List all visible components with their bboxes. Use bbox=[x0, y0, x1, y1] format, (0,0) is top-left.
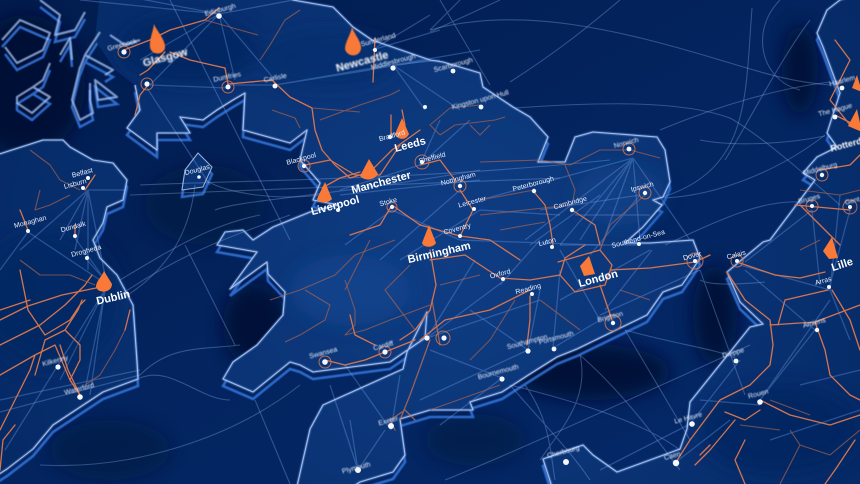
label: Dublin: Dublin bbox=[95, 288, 132, 308]
pin: right edge lower bbox=[848, 109, 860, 132]
blurred distant labels: Bruges bbox=[798, 193, 821, 206]
label: Lille: Lille bbox=[830, 256, 855, 274]
blurred distant labels: Plymouth bbox=[341, 461, 371, 476]
blurred distant labels: Cherbourg bbox=[547, 445, 580, 460]
blurred distant labels: Portsmouth bbox=[538, 330, 575, 346]
sharp town labels: Arras bbox=[814, 276, 833, 287]
blurred distant labels: Edinburgh bbox=[204, 3, 237, 18]
sharp town labels: Dover bbox=[682, 250, 703, 262]
sharp town labels: Peterborough bbox=[512, 176, 555, 193]
blurred distant labels: Dieppe bbox=[722, 347, 745, 360]
orange pins bbox=[96, 24, 860, 292]
pin: Lille bbox=[823, 237, 838, 259]
sharp town labels: Luton bbox=[538, 237, 557, 248]
sharp town labels: Blackpool bbox=[286, 152, 317, 167]
sharp town labels: Calais bbox=[726, 249, 747, 261]
sharp town labels: Stoke bbox=[379, 197, 398, 208]
blurred distant labels: Bournemouth bbox=[477, 364, 520, 381]
sharp town labels: Oxford bbox=[489, 268, 512, 281]
blurred distant labels: Exeter bbox=[378, 415, 400, 427]
blurred distant labels: Brighton bbox=[597, 311, 624, 324]
sharp town labels: Sheffield bbox=[418, 152, 446, 165]
pin: Newcastle bbox=[345, 27, 361, 55]
pin: Manchester bbox=[360, 159, 378, 180]
blurred distant labels: Cardiff bbox=[373, 340, 394, 352]
blurred distant labels: Rouen bbox=[748, 388, 769, 401]
blurred distant labels: Sunderland bbox=[360, 32, 397, 48]
label: Manchester: Manchester bbox=[350, 169, 413, 197]
blurred distant labels: Dumfries bbox=[213, 71, 242, 84]
pin: London bbox=[580, 256, 595, 276]
label: London: London bbox=[577, 268, 620, 290]
blurred distant labels: Kilkenny bbox=[42, 355, 70, 368]
pin: Liverpool bbox=[317, 182, 332, 202]
blurred distant labels: Kingston upon Hull bbox=[451, 89, 510, 111]
road network: continent bbox=[676, 40, 860, 484]
sharp town labels: Dundalk bbox=[60, 221, 87, 234]
sharp town labels: Douglas bbox=[184, 164, 211, 177]
label: Newcastle: Newcastle bbox=[335, 49, 390, 75]
pin: Leeds bbox=[395, 118, 409, 139]
pin: right edge upper bbox=[852, 75, 860, 92]
blurred distant labels: Middlesbrough bbox=[370, 53, 417, 72]
major city labels bbox=[95, 46, 855, 308]
pin: Dublin bbox=[96, 271, 112, 292]
sharp town labels: Belfast bbox=[71, 167, 94, 180]
sharp town labels: Drogheda bbox=[71, 244, 102, 259]
blurred distant labels: Swansea bbox=[309, 346, 338, 361]
pin: Glasgow bbox=[150, 24, 165, 54]
sharp town labels: Southend-on-Sea bbox=[611, 229, 666, 250]
label: Liverpool: Liverpool bbox=[310, 194, 361, 218]
blurred distant labels: Haarlem bbox=[829, 75, 856, 88]
blurred distant labels: Amiens bbox=[802, 317, 827, 330]
blurred distant labels: Le Havre bbox=[674, 411, 703, 426]
blurred distant labels: Carlisle bbox=[263, 73, 288, 84]
sharp town labels: Bradford bbox=[378, 129, 406, 143]
label: Leeds: Leeds bbox=[393, 135, 427, 155]
sharp town labels: Reading bbox=[515, 283, 542, 296]
blurred distant labels: Greenock bbox=[107, 38, 138, 53]
blurred distant labels: Middelburg bbox=[803, 162, 838, 177]
label: Birmingham: Birmingham bbox=[407, 240, 472, 266]
sharp town labels bbox=[13, 129, 833, 296]
road network: Ireland bbox=[0, 150, 130, 470]
sharp town labels: Coventry bbox=[443, 222, 472, 236]
blurred distant labels: Southampton bbox=[506, 334, 549, 351]
sharp town labels: Cambridge bbox=[553, 196, 588, 211]
sharp town labels: Nottingham bbox=[440, 171, 477, 187]
sharp town labels: Lisburn bbox=[63, 178, 87, 191]
sharp town labels: Monaghan bbox=[13, 215, 47, 230]
blurred distant labels: The Hague bbox=[818, 103, 853, 118]
city rings bbox=[118, 46, 857, 368]
pin: Birmingham bbox=[422, 225, 436, 247]
blurred distant labels: Caen bbox=[663, 451, 681, 462]
sharp town labels: Leicester bbox=[458, 195, 488, 210]
blurred distant labels: Scarborough bbox=[433, 57, 474, 74]
road network: Scotland and northern England bbox=[124, 8, 710, 430]
blurred distant labels: Waterford bbox=[64, 382, 95, 397]
blurred distant labels: Norwich bbox=[613, 137, 640, 150]
label: Glasgow: Glasgow bbox=[142, 46, 189, 70]
sharp town labels: Ipswich bbox=[630, 181, 655, 194]
